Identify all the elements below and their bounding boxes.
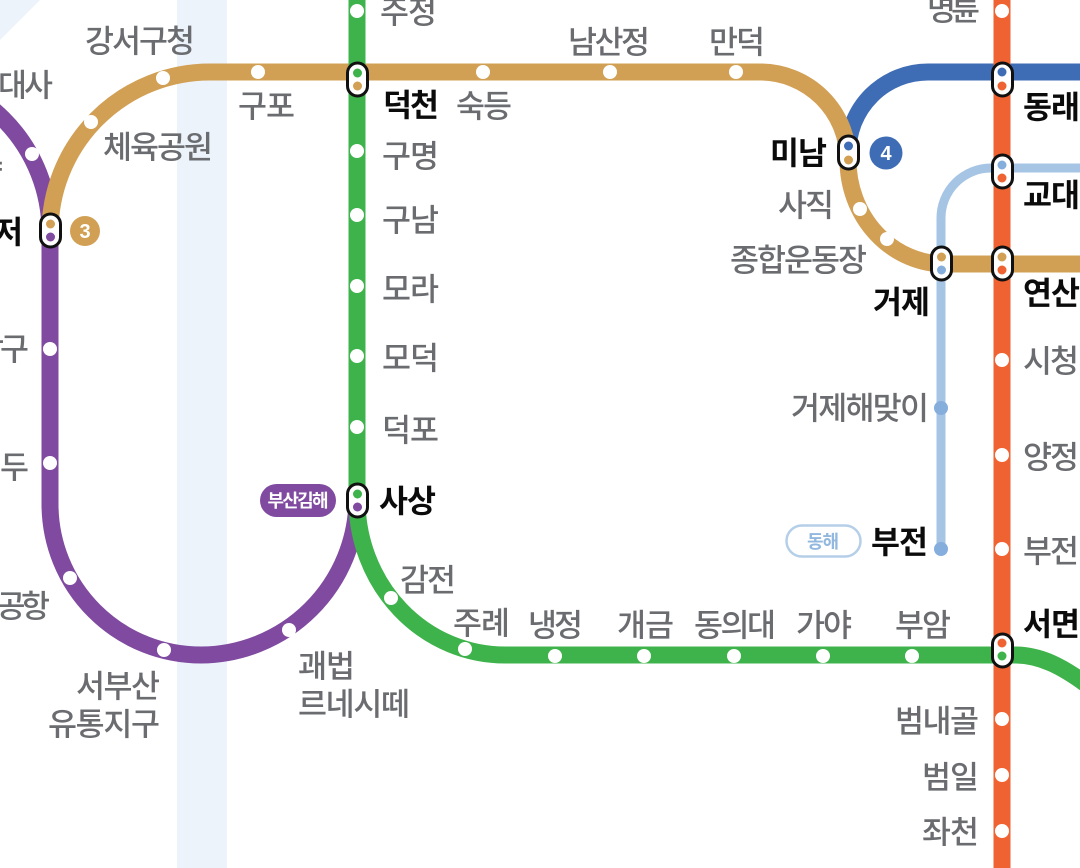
station labels: regular: 거제해맞이 bbox=[791, 390, 929, 426]
background: light blue river bands bbox=[0, 0, 227, 868]
station labels: regular: 모덕 bbox=[382, 340, 439, 376]
badge: Donghae line bbox=[786, 526, 860, 556]
station labels: regular: 만덕 bbox=[709, 24, 765, 60]
badge: Busan-Gimhae line bbox=[260, 484, 336, 517]
badge: Donghae line: 동해 bbox=[807, 532, 839, 552]
station labels: regular: 개금 bbox=[617, 607, 674, 643]
station labels: regular: 르네시떼 bbox=[298, 686, 410, 722]
station labels: regular: 시청 bbox=[1023, 343, 1079, 379]
station labels: regular: 범내골 bbox=[895, 703, 979, 739]
station labels: regular: 구명 bbox=[382, 138, 439, 174]
station labels: transfer stations bbox=[0, 87, 1080, 642]
station labels: regular: 구포 bbox=[238, 88, 295, 124]
station labels: regular: 동의대 bbox=[694, 607, 776, 643]
badge: line 3 bbox=[70, 216, 100, 246]
station labels: regular: 가야 bbox=[796, 607, 852, 643]
station labels: regular: 부전 bbox=[1023, 533, 1079, 569]
station labels: transfer stations: 덕천 bbox=[383, 87, 439, 123]
line: light blue Donghae bbox=[941, 168, 1080, 548]
station labels: regular: 범일 bbox=[922, 759, 979, 795]
line: blue line 4 bbox=[848, 72, 1080, 152]
station labels: transfer stations: 동래 bbox=[1023, 89, 1080, 125]
station labels: regular: 감전 bbox=[400, 562, 456, 598]
badge: line 4: 4 bbox=[880, 143, 892, 165]
orange line overlap at Seomyeon bbox=[994, 625, 1010, 672]
station labels: regular: 강서구청 bbox=[85, 23, 195, 59]
station labels: regular: 남산정 bbox=[568, 24, 650, 60]
station labels: regular: 냉정 bbox=[528, 607, 583, 643]
line: gold line 3 bbox=[50, 72, 1080, 264]
station labels: regular: 사직 bbox=[778, 187, 834, 223]
station labels: regular: 유통지구 bbox=[48, 706, 160, 742]
transfer capsules bbox=[40, 63, 1012, 667]
line: green line 2 bbox=[357, 0, 1080, 687]
station labels: regular: 종합운동장 bbox=[730, 242, 867, 278]
station labels: regular: 양정 bbox=[1023, 439, 1079, 475]
station labels: transfer stations: 미남 bbox=[770, 135, 827, 171]
station labels: regular: 숙등 bbox=[456, 88, 512, 124]
station labels: transfer stations: 서면 bbox=[1023, 606, 1080, 642]
badge: line 3: 3 bbox=[79, 221, 91, 243]
station labels: regular: 체육공원 bbox=[103, 129, 213, 165]
station labels: regular: 덕포 bbox=[382, 412, 439, 448]
station labels: transfer stations: 사상 bbox=[379, 483, 436, 519]
station labels: regular: 두 bbox=[0, 449, 29, 485]
station labels: transfer stations: 교대 bbox=[1023, 177, 1080, 213]
line: purple Busan-Gimhae bbox=[0, 72, 357, 655]
station labels: regular: 서부산 bbox=[76, 668, 160, 704]
badge: line 4 bbox=[870, 136, 902, 170]
line: orange line 1 bbox=[994, 0, 1010, 868]
station labels: transfer stations: 거제 bbox=[873, 284, 930, 320]
Donghae line stations bbox=[934, 401, 948, 556]
station labels: regular: 모라 bbox=[382, 271, 439, 307]
station labels: regular: 괘법 bbox=[298, 648, 355, 684]
badge: Busan-Gimhae line: 부산김해 bbox=[268, 491, 328, 511]
station labels: regular: 부암 bbox=[895, 607, 951, 643]
station labels: transfer stations: 연산 bbox=[1023, 275, 1080, 311]
station labels: regular: 구남 bbox=[382, 202, 439, 238]
station labels: regular: 주례 bbox=[453, 605, 510, 641]
station labels: transfer stations: 부전 bbox=[871, 524, 928, 560]
station labels: regular: 좌천 bbox=[922, 814, 979, 850]
